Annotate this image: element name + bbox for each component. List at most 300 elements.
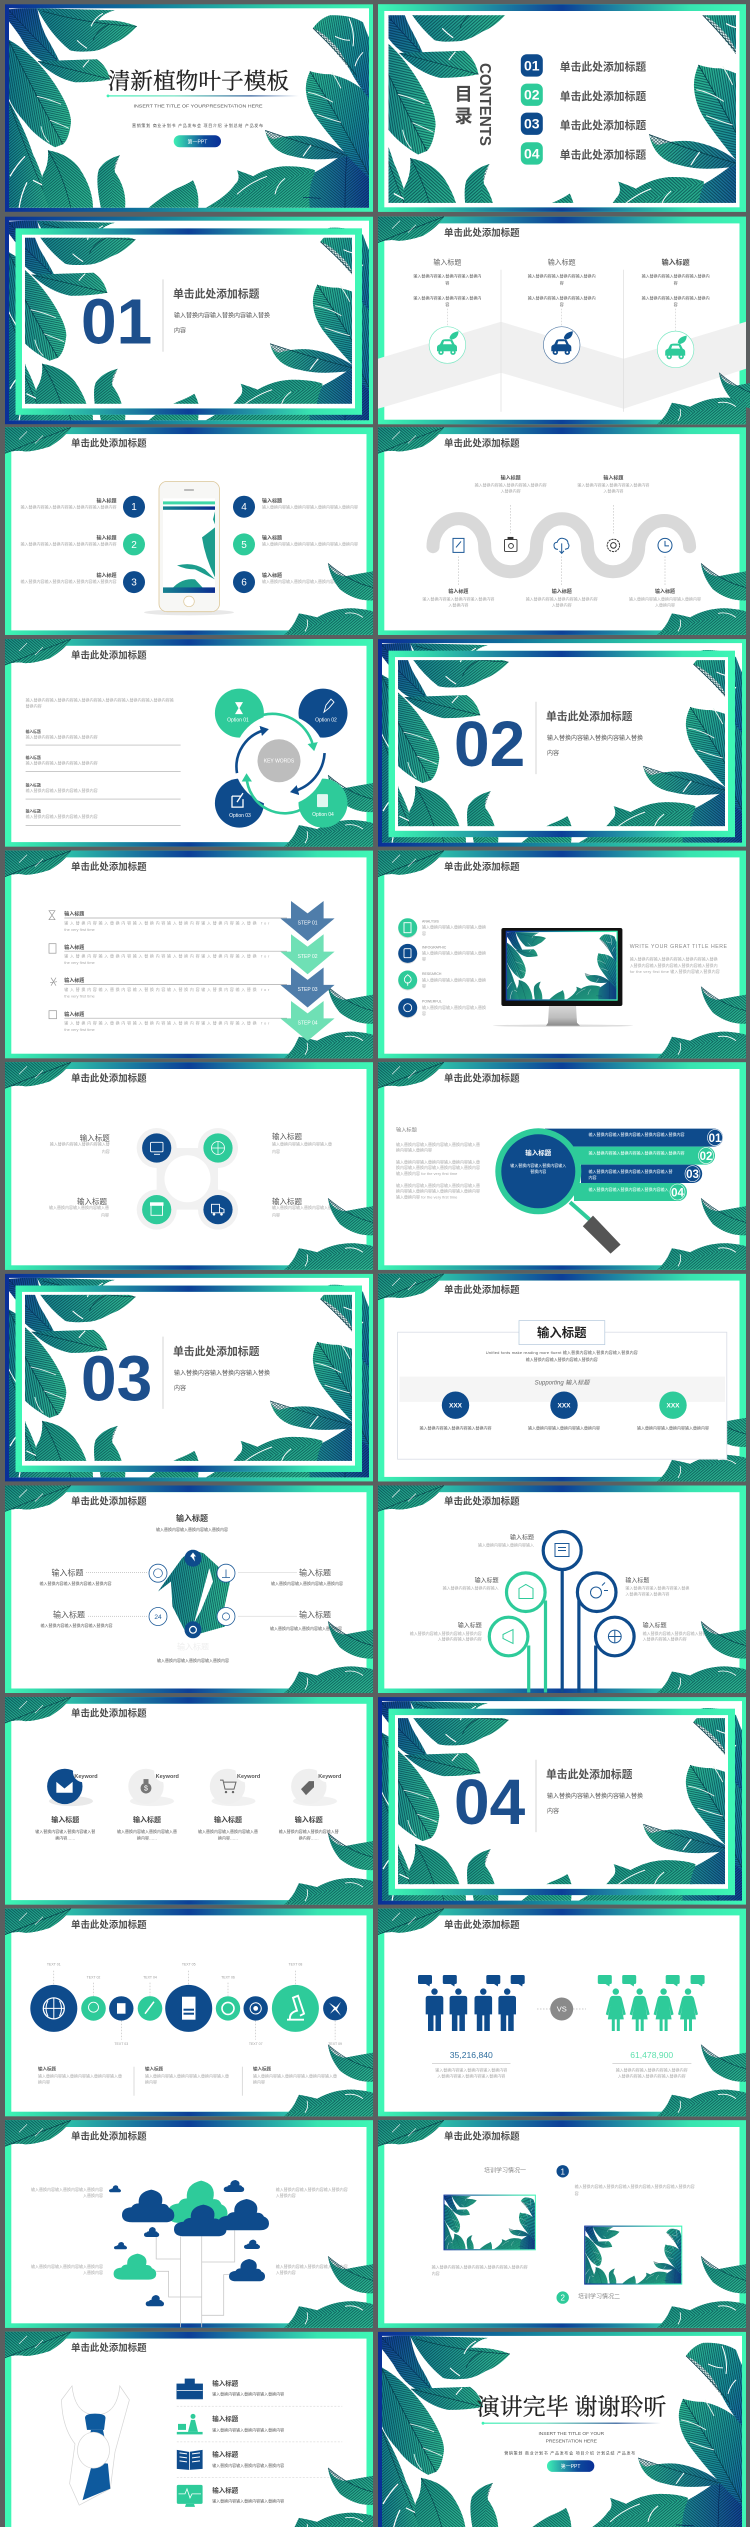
badge 3: 输入替换内容输入替换内容输入替换内容 (637, 1424, 709, 1430)
caption 2: 2 (560, 2294, 565, 2303)
cycle chart: Option 01 (227, 718, 249, 724)
step row 2: 输入标题 (64, 944, 84, 951)
corner leaves (5, 2120, 373, 2328)
corner leaves (5, 1062, 373, 1270)
closing rule (482, 2422, 661, 2425)
label left 1: 输入标题 (52, 1568, 84, 1578)
closing button (547, 2460, 594, 2472)
section title: 单击此处添加标题 (173, 1344, 260, 1358)
heading: 目录: 目 (455, 84, 473, 104)
bar 01 (545, 1129, 723, 1147)
section text (174, 312, 270, 335)
slide title: 单击此处添加标题 (444, 438, 520, 450)
slide title: 单击此处添加标题 (444, 1919, 520, 1931)
slide 3: section 01 (0, 217, 383, 424)
VS badge: VS (557, 2005, 567, 2014)
row 2: 输入标题 (212, 2414, 239, 2423)
label top-left: 内容 (102, 1148, 110, 1154)
slide 2: contents (378, 4, 746, 212)
clover shape (116, 1111, 259, 1246)
top label (156, 1513, 228, 1532)
list item 4 (26, 809, 181, 825)
women group (598, 1975, 705, 2031)
icon: gear (607, 539, 620, 552)
slide 17: keywords (5, 1697, 373, 1905)
slide 19: circles timeline (5, 1909, 373, 2116)
label top-left: 输入替换内容输入替换内容输入替 (50, 1141, 110, 1147)
contents item 01: 01 (524, 57, 540, 73)
feature 1: 输入替换内容输入替换内容输入替换 (422, 924, 486, 930)
left item 3: 输入替换内容输入替换内容输入替换内容输入替换内容 (20, 578, 116, 584)
feature 2: INFOGRAPHIC (422, 945, 447, 949)
keyword 1: Keyword (74, 1774, 98, 1780)
list item 1: 输入标题 (26, 729, 41, 734)
badge 1: 输入替换内容输入替换内容输入替换内容 (420, 1424, 492, 1430)
keyword 1: 输入标题 (51, 1815, 79, 1824)
slide 8: section 02 (373, 639, 750, 847)
women stat (612, 2050, 691, 2078)
large clouds (122, 2181, 269, 2236)
left text: 换内容输入替换内容输入替换内容输入替换内容 (396, 1164, 480, 1170)
slide title: 单击此处添加标题 (71, 2131, 147, 2143)
bubble 9: TEXT 09 (328, 2042, 342, 2046)
bar 04: 04 (671, 1187, 684, 1199)
men stat: 35,216,840 (450, 2050, 493, 2060)
keyword 2 (117, 1762, 179, 1840)
intro text: 输入替换内容输入替换内容输入替换内容输入替换内容输入替换内容输入替换内容输 (26, 697, 174, 703)
row 3: 输入标题 (212, 2450, 239, 2459)
column 3 (642, 258, 710, 368)
top label: 输入标题 (176, 1513, 208, 1523)
column 2: 容 (560, 279, 564, 285)
badge 3: XXX (666, 1402, 680, 1409)
list item 4: 输入替换内容输入替换内容输入替换内容 (26, 813, 98, 819)
lower label 1 (422, 556, 494, 607)
label left 1: 输入替换内容输入替换内容输入替换内容 (40, 1580, 112, 1586)
feature 3: 输入替换内容输入替换内容输入替换 (422, 976, 486, 982)
step arrow 2: STEP 02 (298, 954, 318, 960)
lower label 3: 输入标题 (655, 588, 675, 595)
row 4: 输入标题 (212, 2485, 239, 2494)
slide title: 单击此处添加标题 (444, 2131, 520, 2143)
upper label 1: 入替换内容 (501, 487, 521, 493)
left item 1: 输入标题 (96, 497, 116, 504)
keyword 3: Keyword (237, 1774, 260, 1780)
badge 1: XXX (449, 1402, 463, 1409)
keyword 2: Keyword (156, 1774, 179, 1780)
step arrow 1: STEP 01 (298, 921, 318, 927)
caption 1: 输入替换内容输入替换内容输入替换内容输入替换内容输入替换内容 (575, 2183, 695, 2189)
column 2: 容 (560, 301, 564, 307)
section text: 内容 (174, 327, 186, 335)
ring label 3: 入替换内容输入替换内容 (625, 1590, 669, 1596)
bar 03: 内容 (588, 1174, 596, 1180)
text column 3: 输入替换内容输入替换内容输入替换内容输入替 (253, 2072, 337, 2078)
slide 24: closing (378, 2332, 746, 2527)
ring label 4: 输入替换内容输入替换内容输入替换内容 (410, 1630, 482, 1636)
label bottom-left: 输入标题 (77, 1196, 107, 1206)
right item 6: 输入替换内容输入替换内容输入替换内容输入替换内容 (262, 578, 358, 584)
label left 2 (40, 1610, 147, 1628)
right text: WRITE YOUR GREAT TITLE HERE (630, 944, 728, 950)
upper label 2: 入替换内容 (603, 487, 623, 493)
men stat: 输入替换内容输入替换内容输入替换内容 (435, 2066, 507, 2072)
heading: 目录: 录 (455, 106, 473, 126)
slide title: 单击此处添加标题 (444, 1284, 520, 1296)
label bottom-right: 输入替换内容输入替换内容输入替 (272, 1204, 332, 1210)
keyword 2: 输入标题 (133, 1815, 161, 1824)
step row 2: the very first time (64, 960, 96, 965)
text bottom-left: 入替换内容 (83, 2269, 103, 2275)
left text: 输入替换内容输入替换内容输入替换内容输入替 (396, 1182, 480, 1188)
column 1: 输入替换内容输入替换内容输入替换内 (413, 272, 481, 278)
badge 1 (420, 1392, 492, 1430)
slide 14: boxed panel (378, 1274, 746, 1481)
lower label 2: 输入标题 (552, 588, 572, 595)
corner leaves (5, 2332, 373, 2527)
section text: 输入替换内容输入替换内容输入替换 (174, 312, 270, 320)
label left 2: 输入替换内容输入替换内容输入替换内容 (40, 1622, 112, 1628)
closing keywords: 营销策划 商业计划书 产品发布会 项目介绍 计划总结 产品发布 (504, 2449, 635, 2455)
slide 7: cycle diagram (5, 639, 373, 847)
bar 03: 输入替换内容输入替换内容输入替换内容输入替 (588, 1168, 672, 1174)
ring label 2: 输入标题 (475, 1576, 499, 1584)
section text: 内容 (174, 1384, 186, 1392)
left text: 输入替换内容 for the very first time (396, 1170, 458, 1176)
bar 04 (574, 1183, 687, 1201)
right text: 入替换内容输入替换内容输入替换内容输入替换内 (630, 962, 718, 968)
bubble 8 (272, 1963, 319, 2032)
heading: CONTENTS: CONTENTS (476, 63, 493, 146)
row 2 (177, 2414, 284, 2434)
label bottom-right: 内容 (272, 1212, 280, 1218)
slide 21: clouds (5, 2120, 373, 2328)
text column 3: 输入标题 (253, 2066, 271, 2073)
cover rule (107, 94, 299, 97)
magnifier: 输入替换内容输入替换内容输入 (510, 1162, 566, 1168)
row 3: 输入替换内容输入替换内容输入替换内容 (212, 2462, 284, 2468)
upper label 1: 输入替换内容输入替换内容输入替换内容 (475, 481, 547, 487)
step arrow 4: STEP 04 (298, 1021, 318, 1027)
right item 6 (233, 571, 358, 593)
corner leaves (5, 851, 373, 1058)
tie illustration (62, 2386, 129, 2505)
text column 2: 输入标题 (145, 2066, 163, 2073)
feature 3: 容 (422, 982, 426, 988)
ring label 2 (443, 1576, 499, 1590)
bar 02: 输入替换内容输入替换内容输入替换内容输入替换内容 (588, 1150, 684, 1156)
contents item 03: 单击此处添加标题 (560, 118, 646, 132)
label left 1 (40, 1568, 147, 1586)
step row 1: 输入替换内容输入替换内容输入替换内容输入替换内容输入替换内容输入替换 for (64, 920, 270, 926)
contents item 01 (521, 54, 646, 77)
list item 2 (26, 755, 181, 771)
section divider (162, 279, 164, 352)
slide 13: section 03 (0, 1274, 383, 1481)
label left 2: 输入标题 (53, 1610, 85, 1620)
lower label 1: 输入替换内容输入替换内容输入替换内容 (422, 595, 494, 601)
left text: 换内容输入替换内容 (396, 1147, 432, 1153)
slide title: 单击此处添加标题 (71, 1496, 147, 1508)
bubble 5 (165, 1963, 212, 2032)
picture 1 (444, 2195, 536, 2250)
lower label 3: 入替换内容 (655, 601, 675, 607)
left item 1 (20, 496, 145, 518)
step row 1 (49, 911, 287, 932)
lower label 2: 输入替换内容输入替换内容输入替换内容 (526, 595, 598, 601)
label right 1 (238, 1568, 343, 1586)
caption 1: 1 (560, 2167, 565, 2176)
section text: 输入替换内容输入替换内容输入替换 (547, 734, 643, 742)
bubble 6: TEXT 06 (221, 1976, 235, 1980)
label bottom (157, 1642, 229, 1663)
left text: 输入替换内容输入替换内容输入替换内容输入替 (396, 1141, 480, 1147)
icon: camera (504, 537, 517, 551)
keyword 4 (279, 1762, 341, 1840)
caption 2: 培训学习情况二 (578, 2293, 620, 2301)
keyword 3: 输入替换内容输入替换内容输入替 (198, 1828, 258, 1834)
icon: cloud upload (554, 538, 569, 553)
column 1: 输入替换内容输入替换内容输入替换内 (413, 294, 481, 300)
lower label 1: 入替换内容 (448, 601, 468, 607)
caption 2 (432, 2264, 620, 2304)
left item 3: 3 (131, 578, 137, 589)
text bottom-right: 输入替换内容输入替换内容输入替换内容 (276, 2263, 348, 2269)
circle: monitor icon (142, 1133, 171, 1163)
icon: notes (453, 538, 464, 552)
caption 2: 输入替换内容输入替换内容输入替换内容输入替换内容 (432, 2264, 528, 2270)
slide title: 单击此处添加标题 (71, 1073, 147, 1085)
list item 1 (26, 729, 181, 745)
right text (630, 944, 728, 974)
feature 4: 输入替换内容输入替换内容输入替换 (422, 1004, 486, 1010)
keyword 1 (35, 1762, 98, 1840)
slide 20: people comparison (378, 1909, 746, 2116)
feature 4: POWERFUL (422, 1000, 442, 1004)
wave line (433, 519, 690, 572)
corner leaves (378, 1274, 746, 1481)
slide 23: tie illustration (5, 2332, 373, 2527)
right item 5 (233, 533, 358, 555)
right item 6: 6 (241, 578, 247, 589)
corner leaves (378, 1909, 746, 2116)
column 2 (528, 258, 596, 363)
men stat: 入替换内容输入替换内容输入替换内容 (437, 2072, 505, 2078)
cover button: 第一PPT (188, 138, 207, 145)
text column 2 (145, 2066, 229, 2084)
bubble 8: TEXT 08 (289, 1963, 302, 1967)
section title: 单击此处添加标题 (173, 287, 260, 301)
right item 4: 输入标题 (262, 497, 282, 504)
text bottom-left (31, 2263, 103, 2275)
closing button: 第一PPT (561, 2463, 580, 2470)
phone mockup (144, 481, 234, 615)
step row 2 (49, 944, 287, 965)
bar 01: 01 (709, 1133, 722, 1145)
label bottom-left: 内容 (101, 1212, 109, 1218)
column 3: 容 (674, 279, 678, 285)
lower label 2: 入替换内容 (552, 601, 572, 607)
left item 3 (20, 571, 145, 593)
contents item 02: 单击此处添加标题 (560, 89, 646, 103)
step row 4: 输入标题 (64, 1011, 84, 1018)
badge 2: XXX (557, 1402, 571, 1409)
cycle chart: Option 02 (315, 718, 337, 724)
right text: 输入替换内容输入替换内容输入替换内容输入替换 (630, 956, 718, 962)
circle: globe icon (203, 1133, 233, 1163)
step row 2: 输入替换内容输入替换内容输入替换内容输入替换内容输入替换内容输入替换 for (64, 953, 270, 959)
monitor (493, 928, 633, 1027)
corner leaves (5, 639, 373, 847)
left text: 输入标题 (396, 1126, 417, 1134)
keyword 2: 换内容…… (137, 1834, 157, 1840)
label right 2: 输入替换内容输入替换内容输入替换内容 (270, 1625, 342, 1631)
feature 4: 容 (422, 1010, 426, 1016)
keyword 4: Keyword (318, 1774, 341, 1780)
keyword 3: 输入标题 (214, 1815, 242, 1824)
keyword 4: 输入替换内容输入替换内容输入替 (279, 1828, 339, 1834)
ring label 3: 输入标题 (625, 1576, 649, 1584)
keyword 1: 换内容…… (55, 1834, 75, 1840)
text column 2: 输入替换内容输入替换内容输入替换内容输入替 (145, 2072, 229, 2078)
caption 2: 内容 (432, 2270, 440, 2276)
row 1 (177, 2378, 284, 2399)
section title: 单击此处添加标题 (546, 1767, 633, 1781)
row 4: 输入替换内容输入替换内容输入替换内容 (212, 2498, 284, 2504)
feature 3: RESEARCH (422, 972, 442, 976)
text top-left: 入替换内容 (83, 2192, 103, 2198)
slide 10: monitor (378, 851, 746, 1058)
step arrow 4 (280, 1001, 335, 1041)
upper label 1 (475, 474, 547, 533)
ring label top (478, 1533, 534, 1548)
icon nodes: 24 (154, 1614, 162, 1621)
lower label 3 (629, 556, 701, 607)
list item 3 (26, 783, 181, 799)
bubble 3: TEXT 03 (114, 2042, 128, 2046)
text column 1: 输入替换内容输入替换内容输入替换内容输入替 (38, 2072, 122, 2078)
slide 1: cover (5, 4, 373, 212)
section number: 04 (454, 1766, 526, 1838)
left text: 输入替换内容 for the very first time (396, 1194, 458, 1200)
right item 5: 5 (241, 540, 247, 551)
ring label 4 (410, 1622, 482, 1642)
text top-right (276, 2186, 348, 2198)
small clouds (109, 2180, 265, 2306)
ring label 4: 入替换内容输入替换内容 (438, 1636, 482, 1642)
cover keywords: 营销策划 商业计划书 产品发布会 项目介绍 计划总结 产品发布 (132, 122, 263, 128)
label bottom-left (49, 1196, 109, 1218)
feature 3 (398, 970, 486, 990)
slide 18: section 04 (373, 1697, 750, 1905)
lower label 1: 输入标题 (448, 588, 468, 595)
label top-right: 内容 (272, 1148, 280, 1154)
text column 1: 输入标题 (38, 2066, 56, 2073)
slide 4: three columns (378, 217, 750, 424)
bubble 7: TEXT 07 (249, 2042, 263, 2046)
row 1: 输入替换内容输入替换内容输入替换内容 (212, 2391, 284, 2397)
slide 11: four circles (5, 1062, 373, 1270)
badge 2 (528, 1392, 600, 1430)
keyword 2: 输入替换内容输入替换内容输入替 (117, 1828, 177, 1834)
column 3: 输入标题 (662, 258, 690, 267)
slide 22: two pictures (378, 2120, 746, 2328)
step row 3: 输入替换内容输入替换内容输入替换内容输入替换内容输入替换内容输入替换 for (64, 986, 270, 992)
list item 2: 输入替换内容输入替换内容输入替换内容 (26, 759, 98, 765)
column 1: 容 (445, 279, 449, 285)
panel: Supporting 输入标题 (535, 1378, 590, 1386)
right item 4 (233, 496, 358, 518)
circle: truck icon (203, 1195, 233, 1224)
keyword 4: 换内容…… (299, 1834, 319, 1840)
text column 1 (38, 2066, 122, 2084)
row 4 (177, 2485, 284, 2507)
section title: 单击此处添加标题 (546, 709, 633, 723)
circle: shop icon (142, 1195, 171, 1224)
bubble 1 (30, 1963, 77, 2032)
corner leaves (378, 1486, 746, 1693)
section divider (162, 1337, 164, 1409)
badge 3 (637, 1392, 709, 1430)
feature 4 (398, 998, 486, 1018)
leader lines (54, 1971, 335, 2040)
bubble 2: TEXT 02 (87, 1976, 100, 1980)
label bottom: 输入标题 (177, 1642, 209, 1652)
corner leaves (378, 1062, 746, 1270)
bubble 4: TEXT 04 (143, 1976, 157, 1980)
corner leaves (378, 851, 746, 1058)
section text: 输入替换内容输入替换内容输入替换 (174, 1369, 270, 1377)
section divider (535, 702, 537, 774)
column 2: 输入替换内容输入替换内容输入替换内 (528, 294, 596, 300)
cover title: 清新植物叶子模板 (108, 69, 289, 94)
step row 3: the very first time (64, 993, 96, 998)
women stat: 61,478,900 (630, 2050, 673, 2060)
heading: 目录 (455, 84, 473, 126)
corner leaves (378, 217, 750, 424)
corner leaves (5, 1697, 373, 1905)
step row 1: the very first time (64, 927, 96, 932)
slide 15: shirt diagram (5, 1486, 373, 1693)
text top-right: 入替换内容 (276, 2192, 296, 2198)
slide title: 单击此处添加标题 (444, 227, 520, 239)
right text: for the very first time 输入替换内容输入替换内容 (630, 968, 720, 974)
section panel (16, 228, 362, 415)
column 3: 容 (674, 301, 678, 307)
label bottom-left: 输入替换内容输入替换内容输入替 (49, 1204, 109, 1210)
closing subtitle: INSERT THE TITLE OF YOUR (538, 2431, 605, 2437)
right item 4: 4 (241, 502, 247, 513)
bar 02 (565, 1147, 715, 1165)
section divider (535, 1760, 537, 1832)
column 1 (413, 258, 481, 363)
text top-right: 输入替换内容输入替换内容输入替换内容 (276, 2186, 348, 2192)
contents item 02 (521, 84, 646, 106)
slide title: 单击此处添加标题 (444, 1073, 520, 1085)
left item 2: 输入标题 (96, 534, 116, 541)
feature 2: 容 (422, 956, 426, 962)
top label: 输入替换内容输入替换内容输入替换内容 (156, 1526, 228, 1532)
left item 2: 2 (131, 540, 137, 551)
upper label 2: 输入标题 (603, 474, 623, 481)
ring label 5 (643, 1622, 715, 1642)
section text (174, 1369, 270, 1392)
text bottom-right: 入替换内容 (276, 2269, 296, 2275)
step row 3: 输入标题 (64, 977, 84, 984)
slide 16: tree (378, 1486, 746, 1693)
section number: 01 (81, 285, 152, 357)
column 2: 输入标题 (548, 258, 576, 267)
